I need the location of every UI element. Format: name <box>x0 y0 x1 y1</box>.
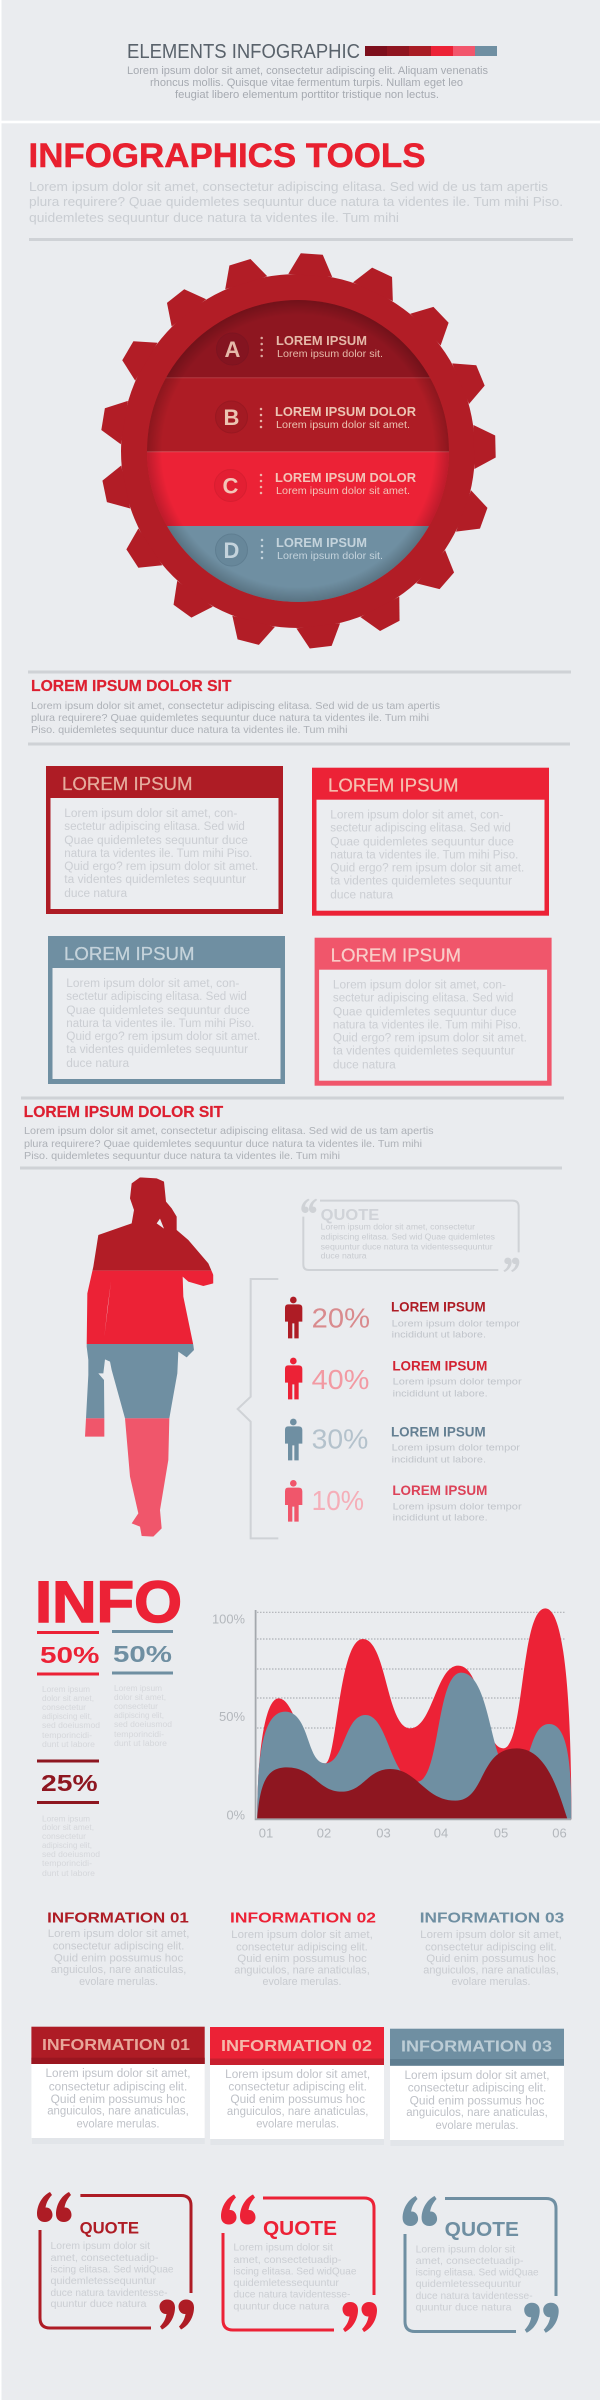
information card 01: Quid enim possumus hoc <box>51 2094 186 2106</box>
icon: opening quote <box>221 2194 256 2224</box>
information column 03: INFORMATION 03 <box>420 1910 564 1927</box>
stat: 30%: incididunt ut labore. <box>392 1454 486 1464</box>
band C: LOREM IPSUM DOLOR <box>275 471 416 485</box>
card: pink: sectetur adipiscing elitasa. Sed wid <box>333 993 514 1005</box>
header title: ELEMENTS INFOGRAPHIC <box>127 41 360 63</box>
card: bright red: Quae quidemletes sequuntur duce <box>330 837 514 849</box>
stat: 10% <box>285 1480 522 1523</box>
bracket <box>238 1279 278 1538</box>
information column 01: consectetur adipiscing elit. <box>53 1941 184 1953</box>
stat: 20%: Lorem ipsum dolor tempor <box>392 1319 520 1329</box>
band D: Lorem ipsum dolor sit. <box>277 550 383 562</box>
quote card dark red: quidemletessequuntur <box>50 2275 157 2287</box>
colour strip <box>365 46 497 56</box>
card: bright red: duce natura <box>330 890 394 902</box>
information column 01: evolare merulas. <box>79 1976 158 1988</box>
information column 03: Quid enim possumus hoc <box>426 1953 556 1965</box>
icon: opening quote <box>37 2192 72 2222</box>
stat block: 25%: temporincidi- <box>42 1859 92 1868</box>
information column 03: Lorem ipsum dolor sit amet, <box>420 1929 562 1941</box>
quote card red: Lorem ipsum dolor sit <box>233 2242 333 2254</box>
quote card dark red: Lorem ipsum dolor sit <box>50 2240 150 2252</box>
card: dark red: Quae quidemletes sequuntur duce <box>64 835 248 847</box>
card: bright red: Quid ergo? rem ipsum dolor sit amet. <box>330 863 524 875</box>
info heading: INFO <box>35 1570 182 1635</box>
stat block: 25% <box>37 1760 100 1878</box>
quote card dark red: quuntur duce natura <box>50 2298 147 2310</box>
silhouette: businessman <box>85 1177 214 1536</box>
stat block: 50% blue: 50% <box>113 1641 172 1667</box>
stat: 30%: LOREM IPSUM <box>391 1424 486 1440</box>
intro paragraph: Lorem ipsum dolor sit amet, consectetur adipiscing elitasa. Sed wid de us tam apertis <box>29 179 549 194</box>
section text one: Piso. quidemletes sequuntur duce natura ta videntes ile. Tum mihi <box>31 724 348 736</box>
card: pink: Quid ergo? rem ipsum dolor sit amet. <box>333 1033 527 1045</box>
card: dark red: duce natura <box>64 888 128 900</box>
quote card blue: duce natura tavidentesse- <box>416 2290 533 2302</box>
y axis labels: 100% <box>212 1612 245 1626</box>
stat block: 50% blue: dunt ut labore <box>114 1739 168 1748</box>
stat block: 50% red <box>37 1631 100 1749</box>
information column 01: INFORMATION 01 <box>47 1910 189 1927</box>
card: slate blue: Quid ergo? rem ipsum dolor sit amet. <box>66 1031 260 1043</box>
stat block: 50% blue: adipiscing elit, <box>114 1711 164 1720</box>
quote card red: quidemletessequuntur <box>233 2277 340 2289</box>
information column 01: Lorem ipsum dolor sit amet, <box>48 1928 189 1940</box>
band C: Lorem ipsum dolor sit amet. <box>276 485 410 497</box>
icon: closing quote <box>524 2303 559 2333</box>
x axis labels: 06 <box>552 1826 567 1840</box>
stat block: 50% blue: consectetur <box>114 1702 158 1711</box>
card: slate blue: sectetur adipiscing elitasa. Sed wid <box>66 991 247 1003</box>
stat block: 50% red: sed doeiusmod <box>42 1721 100 1730</box>
quote card blue: Lorem ipsum dolor sit <box>416 2244 515 2256</box>
stat block: 50% red: consectetur <box>42 1703 86 1712</box>
quote card blue: quidemletessequuntur <box>416 2278 522 2290</box>
card: slate blue: natura ta videntes ile. Tum mihi Piso. <box>66 1018 254 1030</box>
section text two: Piso. quidemletes sequuntur duce natura ta videntes ile. Tum mihi <box>24 1150 340 1162</box>
card: pink: ta videntes quidemletes sequuntur <box>333 1046 515 1058</box>
quote box: duce natura <box>321 1252 367 1261</box>
information card 02: evolare merulas. <box>256 2118 339 2130</box>
stat: 40%: 40% <box>312 1364 369 1395</box>
x axis labels: 03 <box>376 1826 391 1840</box>
card: dark red: Quid ergo? rem ipsum dolor sit amet. <box>64 861 258 873</box>
card: pink: Quae quidemletes sequuntur duce <box>333 1007 517 1019</box>
band C <box>214 470 416 502</box>
quote card blue <box>403 2196 559 2333</box>
card: slate blue <box>48 936 285 1084</box>
information column 03: consectetur adipiscing elit. <box>425 1942 557 1954</box>
information column 02: consectetur adipiscing elit. <box>236 1942 368 1954</box>
quote box: sequuntur duce natura ta videntessequuntur <box>321 1242 493 1251</box>
band D: LOREM IPSUM <box>276 536 367 550</box>
card: slate blue: LOREM IPSUM <box>64 943 194 964</box>
card: pink: natura ta videntes ile. Tum mihi Piso. <box>333 1020 521 1032</box>
quote card blue: amet, consectetuadip- <box>416 2255 524 2267</box>
stat: 40%: LOREM IPSUM <box>392 1358 487 1374</box>
information card 02: INFORMATION 02 <box>221 2038 372 2055</box>
card: slate blue: ta videntes quidemletes sequuntur <box>66 1044 248 1056</box>
section heading two: LOREM IPSUM DOLOR SIT <box>24 1104 224 1121</box>
card: bright red: Lorem ipsum dolor sit amet, con- <box>330 810 503 822</box>
stat: 20%: 20% <box>312 1303 370 1334</box>
header description: rhoncus mollis. Quisque vitae fermentum turpis. Nullam eget leo <box>150 77 463 89</box>
quote box: QUOTE <box>321 1207 379 1224</box>
stat block: 25%: 25% <box>41 1770 98 1796</box>
quote card red: QUOTE <box>263 2218 337 2240</box>
information card 03: consectetur adipiscing elit. <box>408 2083 546 2095</box>
information card 03: Lorem ipsum dolor sit amet, <box>404 2070 550 2082</box>
stat block: 50% blue: sed doeiusmod <box>114 1720 172 1729</box>
gear shape <box>100 252 496 650</box>
section text two: Lorem ipsum dolor sit amet, consectetur adipiscing elitasa. Sed wid de us tam apertis <box>24 1125 434 1137</box>
card: pink: duce natura <box>333 1060 396 1072</box>
section text one: Lorem ipsum dolor sit amet, consectetur adipiscing elitasa. Sed wid de us tam apertis <box>31 700 440 712</box>
stat block: 50% blue <box>112 1630 173 1748</box>
band A: Lorem ipsum dolor sit. <box>277 348 383 360</box>
section heading one: LOREM IPSUM DOLOR SIT <box>31 678 232 695</box>
quote card blue: quuntur duce natura <box>416 2302 512 2314</box>
band B: Lorem ipsum dolor sit amet. <box>276 419 410 431</box>
stat block: 25%: sed doeiusmod <box>42 1850 100 1859</box>
information card 01: consectetur adipiscing elit. <box>49 2082 187 2094</box>
y axis labels: 0% <box>226 1808 245 1822</box>
icon: closing quote <box>342 2302 377 2332</box>
area chart <box>212 1608 571 1840</box>
information column 02: Quid enim possumus hoc <box>237 1953 367 1965</box>
card: slate blue: duce natura <box>66 1058 130 1070</box>
quote card red: iscing elitasa. Sed widQuae <box>233 2266 357 2278</box>
information card 02: anguiculos, nare anaticulas, <box>227 2106 369 2118</box>
quote card red: duce natura tavidentesse- <box>233 2289 351 2301</box>
x axis labels: 01 <box>259 1826 273 1840</box>
information card 02 <box>210 2027 384 2145</box>
quote card blue: iscing elitasa. Sed widQuae <box>416 2267 539 2279</box>
information column 02 <box>230 1910 376 1988</box>
icon: person pink <box>285 1480 302 1522</box>
icon: closing quote <box>503 1258 519 1272</box>
section text one: plura requirere? Quae quidemletes sequuntur duce natura ta videntes ile. Tum mihi <box>31 712 429 724</box>
gear diagram <box>100 252 496 650</box>
quote card blue: QUOTE <box>445 2219 519 2241</box>
x axis labels: 05 <box>494 1826 508 1840</box>
information column 02: evolare merulas. <box>262 1976 342 1988</box>
intro paragraph <box>29 179 563 225</box>
stat block: 50% red: adipiscing elit, <box>42 1712 92 1721</box>
stat block: 50% red: dunt ut labore <box>42 1740 96 1749</box>
stat: 30%: 30% <box>312 1423 368 1454</box>
quote box: adipiscing elitasa. Sed wid Quae quidemletes <box>321 1232 495 1241</box>
intro paragraph: plura requirere? Quae quidemletes sequuntur duce natura ta videntes ile. Tum mihi Piso. <box>29 194 563 209</box>
stat block: 50% red: Lorem ipsum <box>42 1685 90 1694</box>
stat block: 25%: Lorem ipsum <box>42 1814 90 1824</box>
quote box: Lorem ipsum dolor sit amet, consectetur <box>321 1222 475 1231</box>
quote box <box>301 1199 519 1272</box>
card: bright red: natura ta videntes ile. Tum mihi Piso. <box>330 850 518 862</box>
stat: 10%: incididunt ut labore. <box>393 1513 488 1523</box>
quote card dark red: amet, consectetuadip- <box>50 2252 159 2264</box>
information column 02: anguiculos, nare anaticulas, <box>234 1964 370 1976</box>
information card 03 <box>390 2029 564 2146</box>
card: slate blue: Lorem ipsum dolor sit amet, con- <box>66 978 239 990</box>
information column 01 <box>47 1910 189 1988</box>
card: pink: LOREM IPSUM <box>331 945 461 966</box>
stat: 30% <box>285 1419 520 1464</box>
information card 02: Lorem ipsum dolor sit amet, <box>225 2069 370 2081</box>
stat block: 50% blue: temporincidi- <box>114 1730 164 1739</box>
section text one <box>31 700 440 736</box>
icon: person red <box>285 1358 302 1399</box>
stat: 10%: LOREM IPSUM <box>392 1482 487 1498</box>
information card 01: INFORMATION 01 <box>42 2037 190 2054</box>
information card 01: Lorem ipsum dolor sit amet, <box>46 2068 190 2080</box>
stat: 40%: Lorem ipsum dolor tempor <box>393 1377 522 1387</box>
stat block: 50% blue: dolor sit amet, <box>114 1693 166 1702</box>
information card 03: INFORMATION 03 <box>401 2038 552 2056</box>
quote card dark red: duce natura tavidentesse- <box>50 2287 168 2299</box>
stat block: 25%: dolor sit amet, <box>42 1823 94 1832</box>
x axis labels <box>259 1826 567 1840</box>
header description: feugiat libero elementum porttitor tristique non lectus. <box>175 89 439 101</box>
icon: closing quote <box>160 2300 194 2330</box>
stat: 20% <box>285 1297 520 1340</box>
card: slate blue: Quae quidemletes sequuntur duce <box>66 1005 250 1017</box>
intro paragraph: quidemletes sequuntur duce natura ta videntes ile. Tum mihi <box>29 210 399 225</box>
band A: A <box>225 337 241 362</box>
information card 01: evolare merulas. <box>76 2118 160 2130</box>
band B: LOREM IPSUM DOLOR <box>275 405 416 419</box>
information card 03: evolare merulas. <box>436 2120 518 2132</box>
band A <box>216 333 383 365</box>
y axis labels: 50% <box>219 1709 245 1724</box>
card: dark red: natura ta videntes ile. Tum mihi Piso. <box>64 848 252 860</box>
icon: opening quote <box>301 1199 317 1213</box>
information card 02: consectetur adipiscing elit. <box>228 2082 367 2094</box>
information column 03: anguiculos, nare anaticulas, <box>423 1964 559 1976</box>
card: bright red <box>312 768 549 916</box>
stat block: 50% red: 50% <box>40 1642 100 1668</box>
quote card red <box>221 2194 377 2332</box>
icon: opening quote <box>403 2196 437 2226</box>
quote card red: quuntur duce natura <box>233 2301 330 2313</box>
stat block: 50% red: dolor sit amet, <box>42 1694 94 1703</box>
main title: INFOGRAPHICS TOOLS <box>28 137 426 175</box>
y axis labels <box>212 1612 245 1822</box>
stat: 10%: 10% <box>312 1485 364 1516</box>
information column 03 <box>420 1910 564 1988</box>
information column 01: anguiculos, nare anaticulas, <box>51 1964 186 1976</box>
header description: Lorem ipsum dolor sit amet, consectetur adipiscing elit. Aliquam venenatis <box>127 65 488 77</box>
stat block: 25%: consectetur <box>42 1832 86 1841</box>
card: bright red: ta videntes quidemletes sequuntur <box>330 876 512 888</box>
stat: 20%: incididunt ut labore. <box>392 1330 486 1340</box>
stat block: 25%: dunt ut labore <box>42 1869 96 1878</box>
band C: C <box>223 474 239 498</box>
icon: person blue <box>285 1419 302 1460</box>
quote card dark red: QUOTE <box>80 2219 139 2237</box>
card: dark red: ta videntes quidemletes sequuntur <box>64 874 246 886</box>
x axis labels: 02 <box>317 1826 331 1840</box>
information column 03: evolare merulas. <box>452 1976 530 1988</box>
header description <box>127 65 488 101</box>
stat: 10%: Lorem ipsum dolor tempor <box>393 1502 522 1512</box>
card: pink <box>315 938 552 1086</box>
chart areas <box>257 1608 571 1819</box>
information card 03: anguiculos, nare anaticulas, <box>406 2107 548 2119</box>
information card 02: Quid enim possumus hoc <box>230 2094 365 2106</box>
gear inner bands <box>140 295 460 606</box>
quote card dark red <box>37 2192 194 2330</box>
card: pink: Lorem ipsum dolor sit amet, con- <box>333 980 506 992</box>
card: dark red: Lorem ipsum dolor sit amet, con- <box>64 808 237 820</box>
stat: 30%: Lorem ipsum dolor tempor <box>392 1443 520 1453</box>
chart axes <box>256 1610 571 1819</box>
header block <box>127 41 497 101</box>
band B: B <box>224 405 239 430</box>
stat: 20%: LOREM IPSUM <box>391 1299 486 1315</box>
card: bright red: sectetur adipiscing elitasa. Sed wid <box>330 823 511 835</box>
x axis labels: 04 <box>434 1826 448 1840</box>
band B <box>216 401 416 433</box>
stat block: 50% red: temporincidi- <box>42 1731 92 1740</box>
stat: 40% <box>285 1358 522 1399</box>
icon: person dark red <box>285 1297 302 1338</box>
person and stats section <box>80 1173 522 1542</box>
card: dark red: sectetur adipiscing elitasa. Sed wid <box>64 821 245 833</box>
information card 01 <box>31 2027 205 2144</box>
card: dark red <box>46 766 283 914</box>
band D <box>216 534 383 566</box>
section text two: plura requirere? Quae quidemletes sequuntur duce natura ta videntes ile. Tum mihi <box>24 1138 422 1150</box>
quote card dark red: iscing elitasa. Sed widQuae <box>50 2264 174 2276</box>
information card 01: anguiculos, nare anaticulas, <box>47 2106 189 2118</box>
quote card red: amet, consectetuadip- <box>233 2254 342 2266</box>
information column 02: INFORMATION 02 <box>230 1910 376 1927</box>
information card 03: Quid enim possumus hoc <box>410 2096 545 2108</box>
card: dark red: LOREM IPSUM <box>62 773 192 794</box>
information column 02: Lorem ipsum dolor sit amet, <box>231 1929 373 1941</box>
section text two <box>24 1125 434 1162</box>
card: bright red: LOREM IPSUM <box>328 775 458 796</box>
band A: LOREM IPSUM <box>276 334 367 348</box>
information column 01: Quid enim possumus hoc <box>54 1953 184 1965</box>
stat: 40%: incididunt ut labore. <box>393 1389 488 1399</box>
stat block: 50% blue: Lorem ipsum <box>114 1684 162 1693</box>
stat block: 25%: adipiscing elit, <box>42 1841 92 1850</box>
band D: D <box>224 538 239 563</box>
